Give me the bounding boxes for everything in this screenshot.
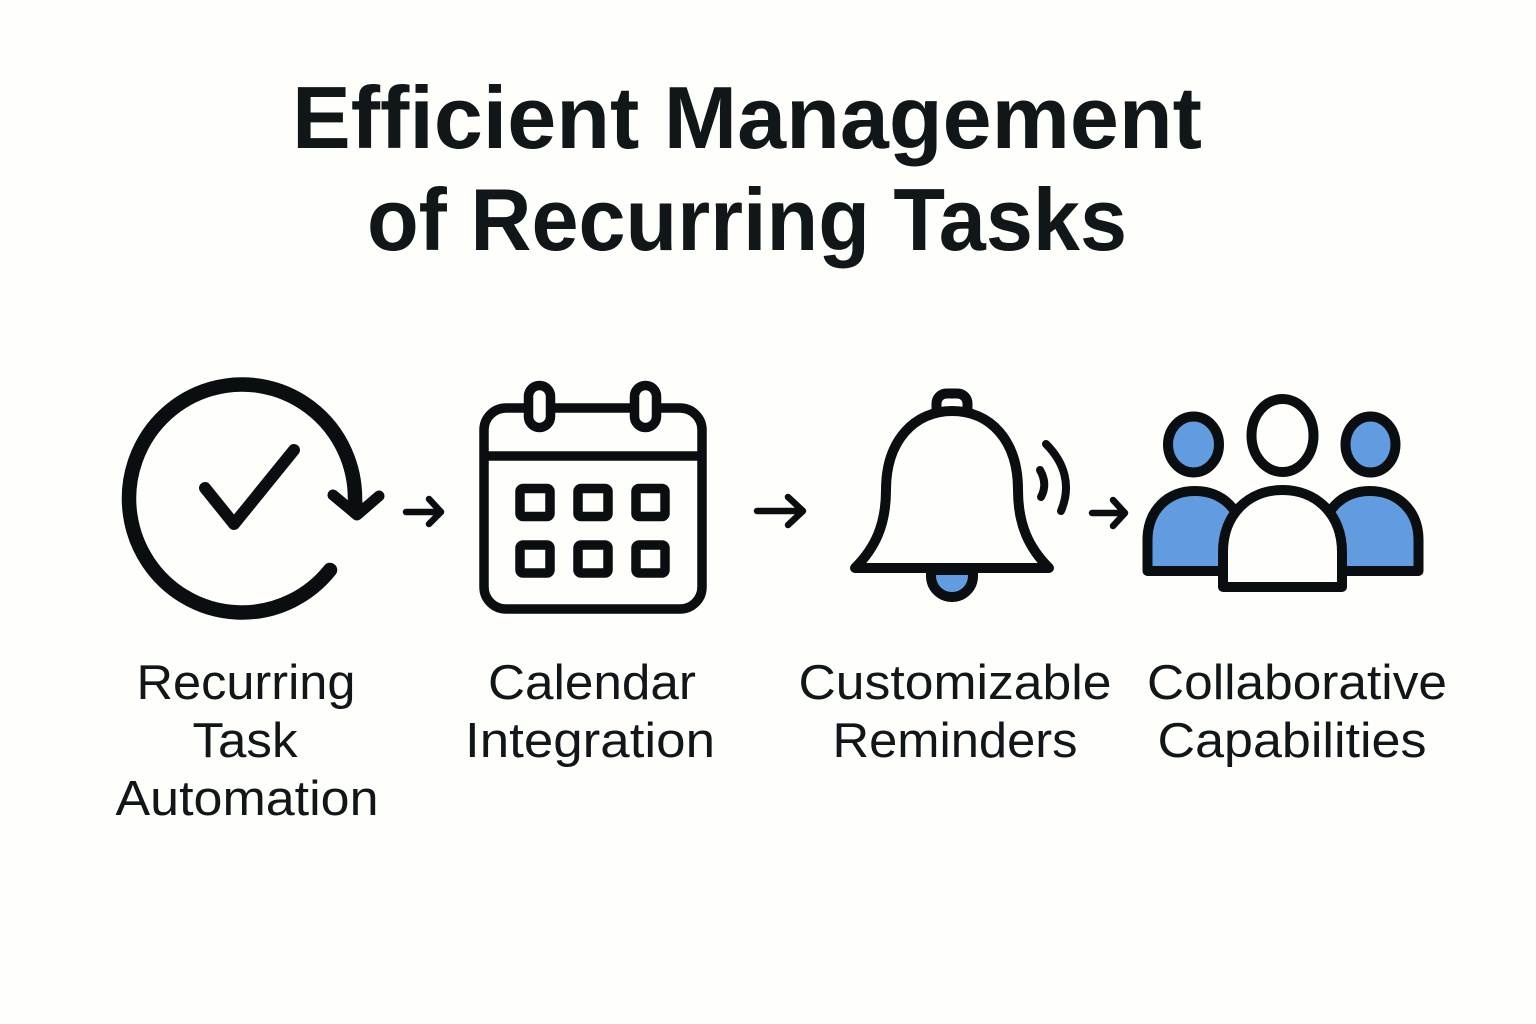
label: customizable reminders: Reminders (832, 714, 1078, 768)
label: customizable reminders: Customizable (798, 656, 1112, 710)
icon: recurring check (129, 384, 379, 612)
title (292, 68, 1202, 269)
label: calendar integration: Integration (465, 714, 715, 768)
icon: bell (855, 394, 1066, 597)
label: recurring task automation: Recurring (136, 656, 356, 710)
arrow 3 (1092, 500, 1125, 526)
label: recurring task automation: Automation (116, 772, 378, 826)
label: recurring task automation (116, 656, 378, 826)
title: Efficient Management (292, 68, 1202, 167)
label: customizable reminders (798, 656, 1112, 768)
label: collaborative capabilities (1147, 656, 1447, 768)
title: of Recurring Tasks (367, 170, 1127, 269)
label: recurring task automation: Task (192, 714, 298, 768)
label: collaborative capabilities: Collaborative (1147, 656, 1447, 710)
icon: team (1148, 399, 1418, 587)
arrow 1 (406, 499, 441, 524)
icon: calendar (484, 386, 702, 609)
label: collaborative capabilities: Capabilities (1158, 714, 1426, 768)
label: calendar integration: Calendar (488, 656, 696, 710)
label: calendar integration (465, 656, 715, 768)
arrow 2 (757, 497, 803, 525)
